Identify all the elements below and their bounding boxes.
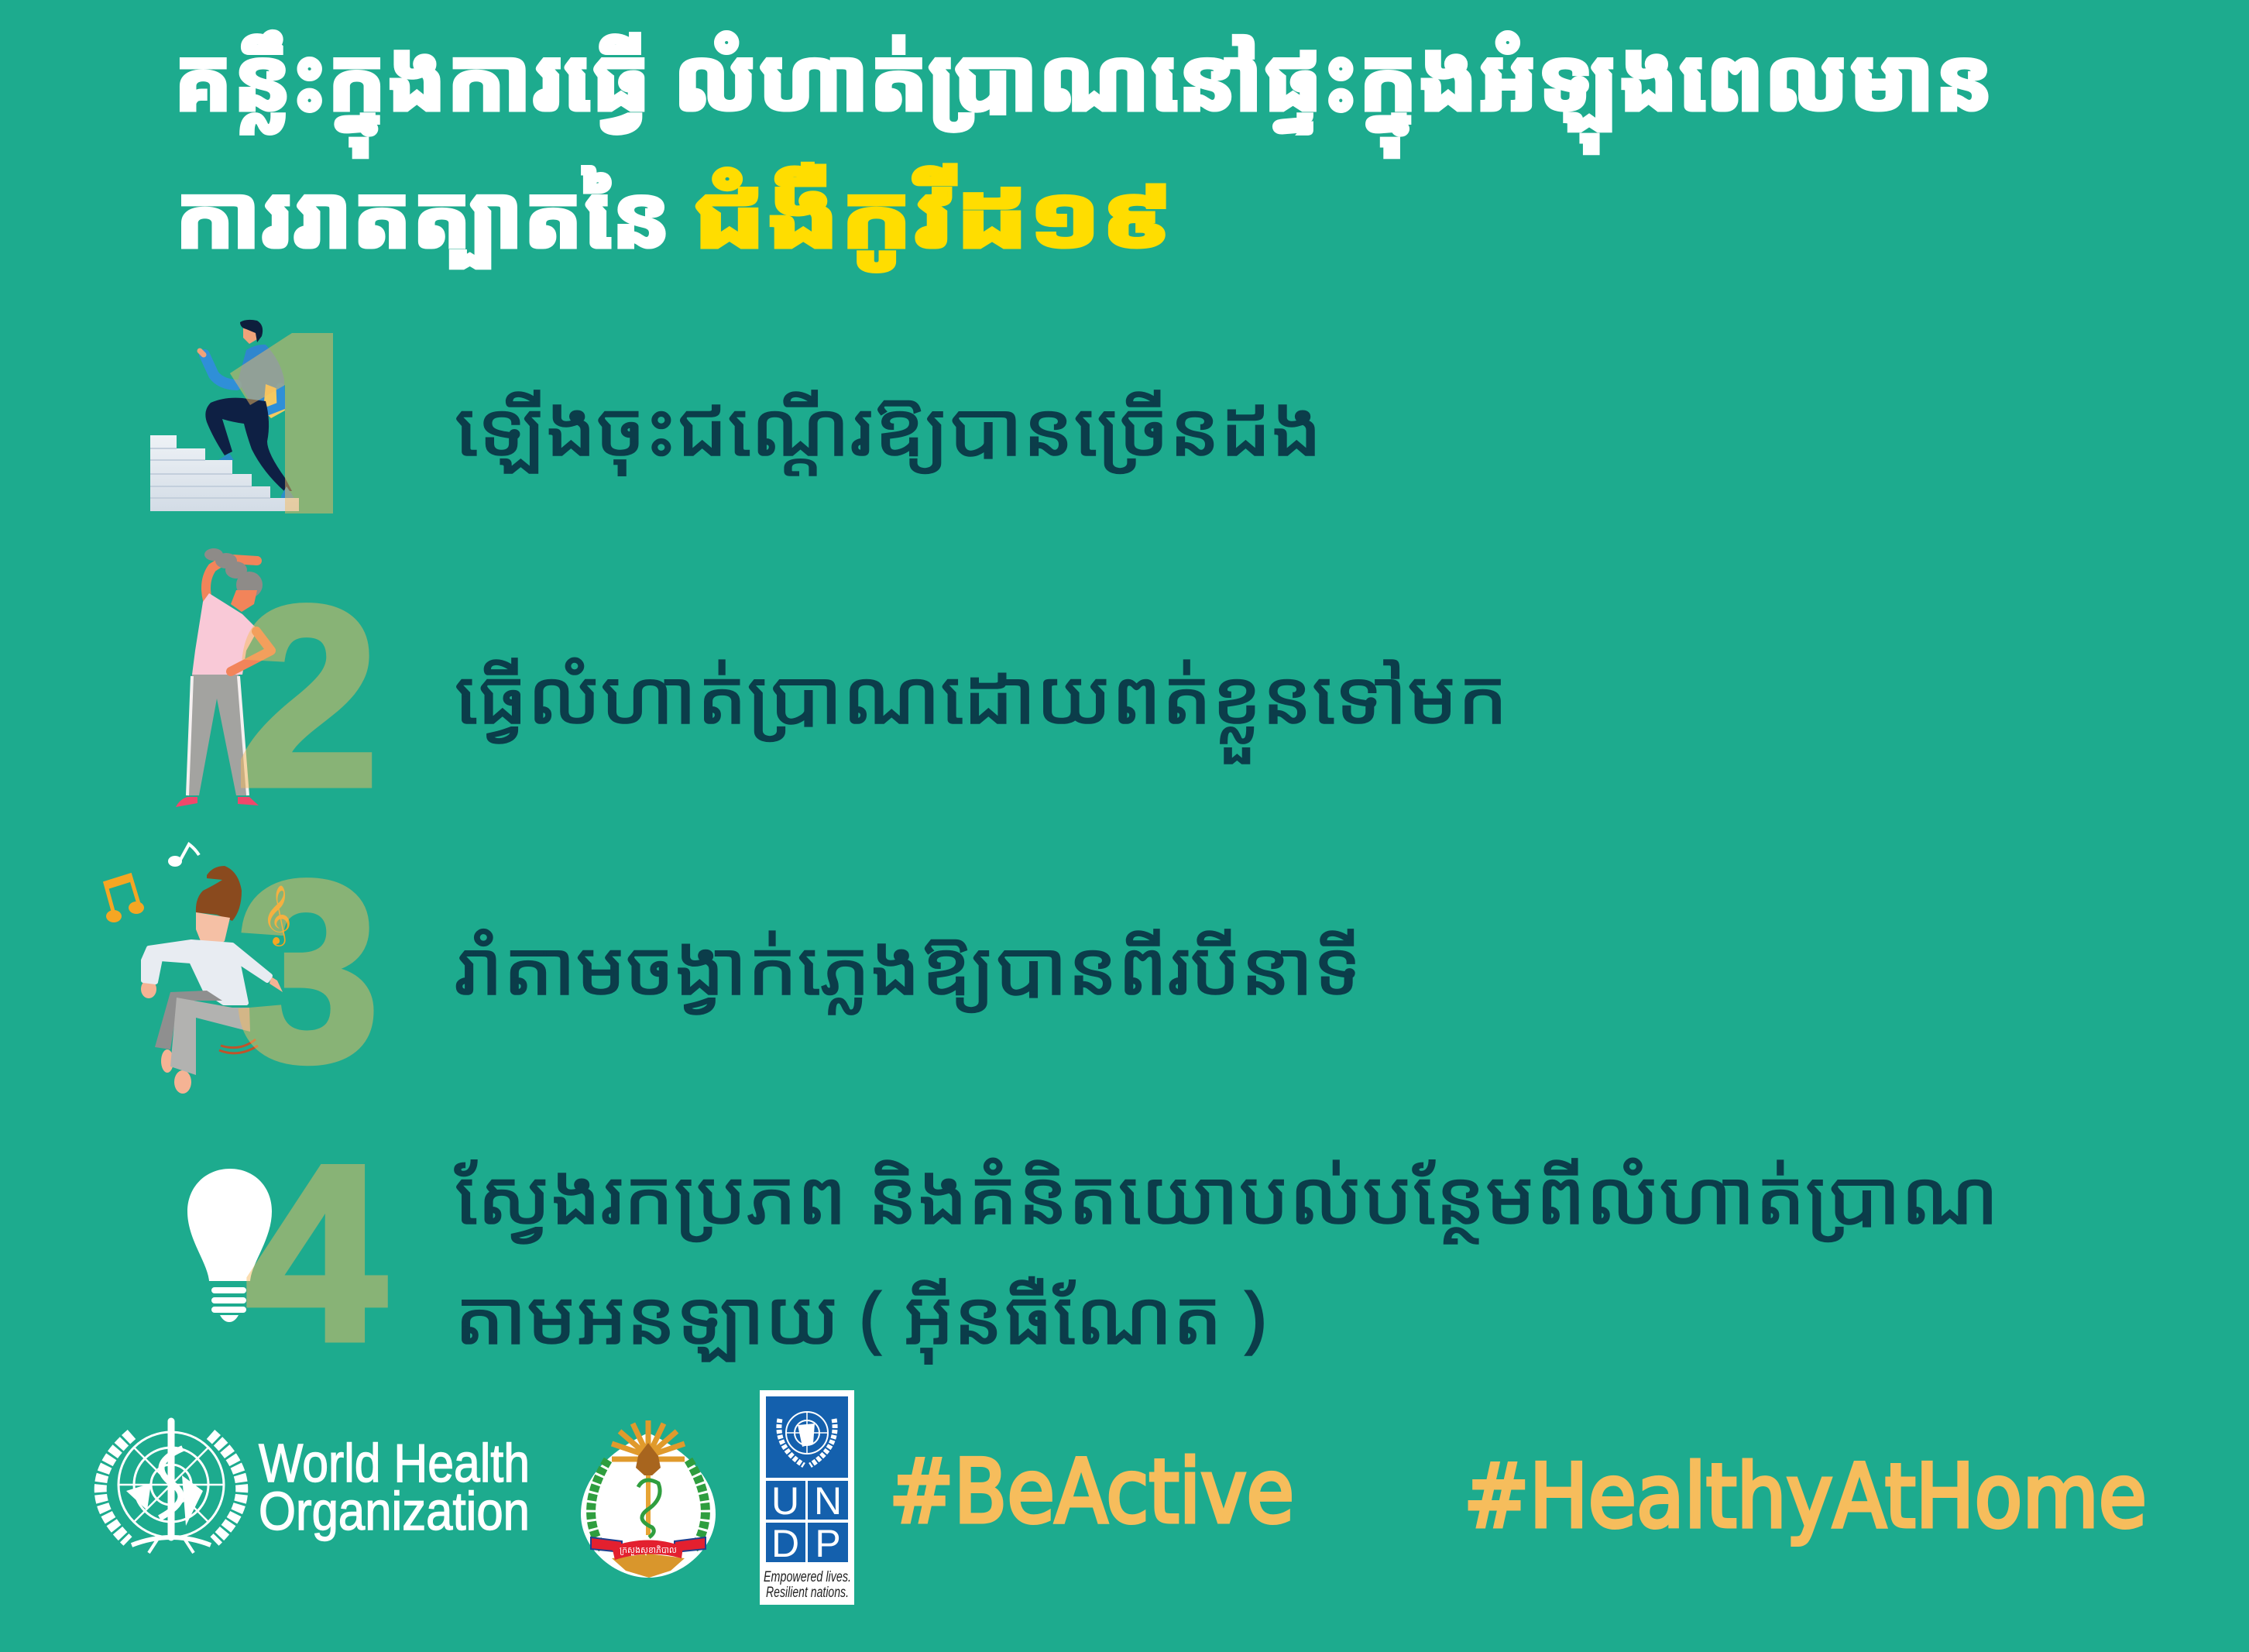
title bbox=[173, 17, 1993, 273]
numeral 3: 3 bbox=[236, 828, 379, 1114]
UNDP tagline bbox=[764, 1569, 851, 1601]
hashtag: HealthyAtHome: #HealthyAtHome bbox=[1464, 1445, 2147, 1547]
staff and snake bbox=[638, 1475, 660, 1537]
near sleeve bbox=[267, 387, 281, 411]
white panel bbox=[760, 1390, 854, 1605]
head bbox=[240, 320, 263, 344]
tip 4 text line 2: តាមអនឡាយ ( អ៊ីនធឺណែត ) bbox=[455, 1265, 1266, 1366]
tips list bbox=[455, 376, 1999, 1366]
tip 1 text: ឡើងចុះជណ្តើរឱ្យបានច្រើនដង bbox=[455, 376, 1322, 478]
shirt bbox=[192, 593, 258, 675]
tip 3 text: រាំតាមចង្វាក់ភ្លេងឱ្យបានពីរបីនាទី bbox=[455, 915, 1361, 1017]
gold base ornament bbox=[612, 1554, 685, 1578]
icon: light bulb bbox=[187, 1169, 272, 1322]
torso and arms bbox=[200, 345, 285, 412]
trousers bbox=[155, 991, 250, 1075]
numeral 2: 2 bbox=[235, 553, 379, 839]
logo: Ministry of Health Cambodia bbox=[581, 1420, 716, 1578]
logo: World Health Organization bbox=[101, 1421, 530, 1553]
trousers bbox=[187, 675, 248, 795]
illustration: woman stretching bbox=[176, 548, 271, 807]
white music note bbox=[168, 844, 199, 867]
WHO emblem bbox=[101, 1421, 242, 1553]
blue UN panel bbox=[766, 1396, 848, 1478]
tip 4 text line 1: ស្វែងរកប្រភព និងគំនិតយោបល់បន្ថែមពីលំហាត់ប្រាណ bbox=[455, 1145, 1999, 1246]
numerals bbox=[230, 333, 388, 1343]
hip arm bbox=[231, 631, 271, 671]
numeral 4: 4 bbox=[246, 1114, 387, 1393]
red banner bbox=[591, 1537, 706, 1560]
logo: UNDP bbox=[760, 1390, 854, 1605]
UNDP letter tiles: D bbox=[771, 1522, 799, 1565]
numeral 1: 1 bbox=[209, 280, 337, 565]
face bbox=[231, 590, 257, 612]
orange music note bbox=[105, 875, 144, 922]
hands bbox=[141, 977, 283, 998]
gold rays bbox=[612, 1420, 685, 1459]
hair bbox=[196, 866, 242, 921]
WHO name: World Health bbox=[259, 1433, 530, 1493]
UN emblem bbox=[779, 1412, 835, 1465]
face bbox=[196, 912, 230, 949]
UNDP letter tiles: N bbox=[814, 1479, 842, 1523]
title line 1: គន្លឹះក្នុងការធ្វើ លំហាត់ប្រាណនៅផ្ទះក្នុងអំឡុងពេលមាន bbox=[173, 17, 1993, 157]
illustration: dancer with music notes bbox=[105, 844, 292, 1094]
WHO name bbox=[259, 1433, 530, 1541]
shoes bbox=[176, 797, 259, 807]
trousers bbox=[205, 398, 292, 491]
shoes bbox=[218, 453, 294, 498]
stairs bbox=[150, 435, 299, 511]
title line 2 yellow part: ជំងឺកូវីដ១៩ bbox=[692, 154, 1173, 273]
UNDP tagline: Empowered lives. bbox=[764, 1569, 851, 1585]
illustration: man climbing stairs bbox=[150, 320, 299, 511]
tip 2 text: ធ្វើលំហាត់ប្រាណដោយពត់ខ្លួនទៅមក bbox=[455, 644, 1508, 763]
UNDP letter tiles: P bbox=[815, 1522, 841, 1565]
motion swoosh bbox=[219, 1039, 258, 1053]
shirt bbox=[143, 942, 270, 1003]
UNDP tagline: Resilient nations. bbox=[766, 1585, 849, 1601]
white oval bbox=[581, 1433, 716, 1578]
red banner: ក្រសួងសុខាភិបាល bbox=[620, 1543, 677, 1556]
hashtag: BeActive: #BeActive bbox=[889, 1441, 1294, 1543]
hair bbox=[204, 548, 263, 598]
title line 2 white part: ការរាតត្បាតនៃ bbox=[175, 154, 671, 273]
WHO name: Organization bbox=[259, 1481, 530, 1541]
UNDP letter tiles bbox=[766, 1479, 848, 1565]
arms bbox=[206, 559, 257, 600]
crown bbox=[636, 1443, 661, 1475]
feet bbox=[161, 1049, 191, 1094]
backpack bbox=[263, 384, 285, 418]
treble clef: 𝄞 bbox=[262, 884, 292, 946]
UNDP letter tiles: U bbox=[771, 1479, 799, 1523]
green laurels bbox=[591, 1460, 706, 1549]
